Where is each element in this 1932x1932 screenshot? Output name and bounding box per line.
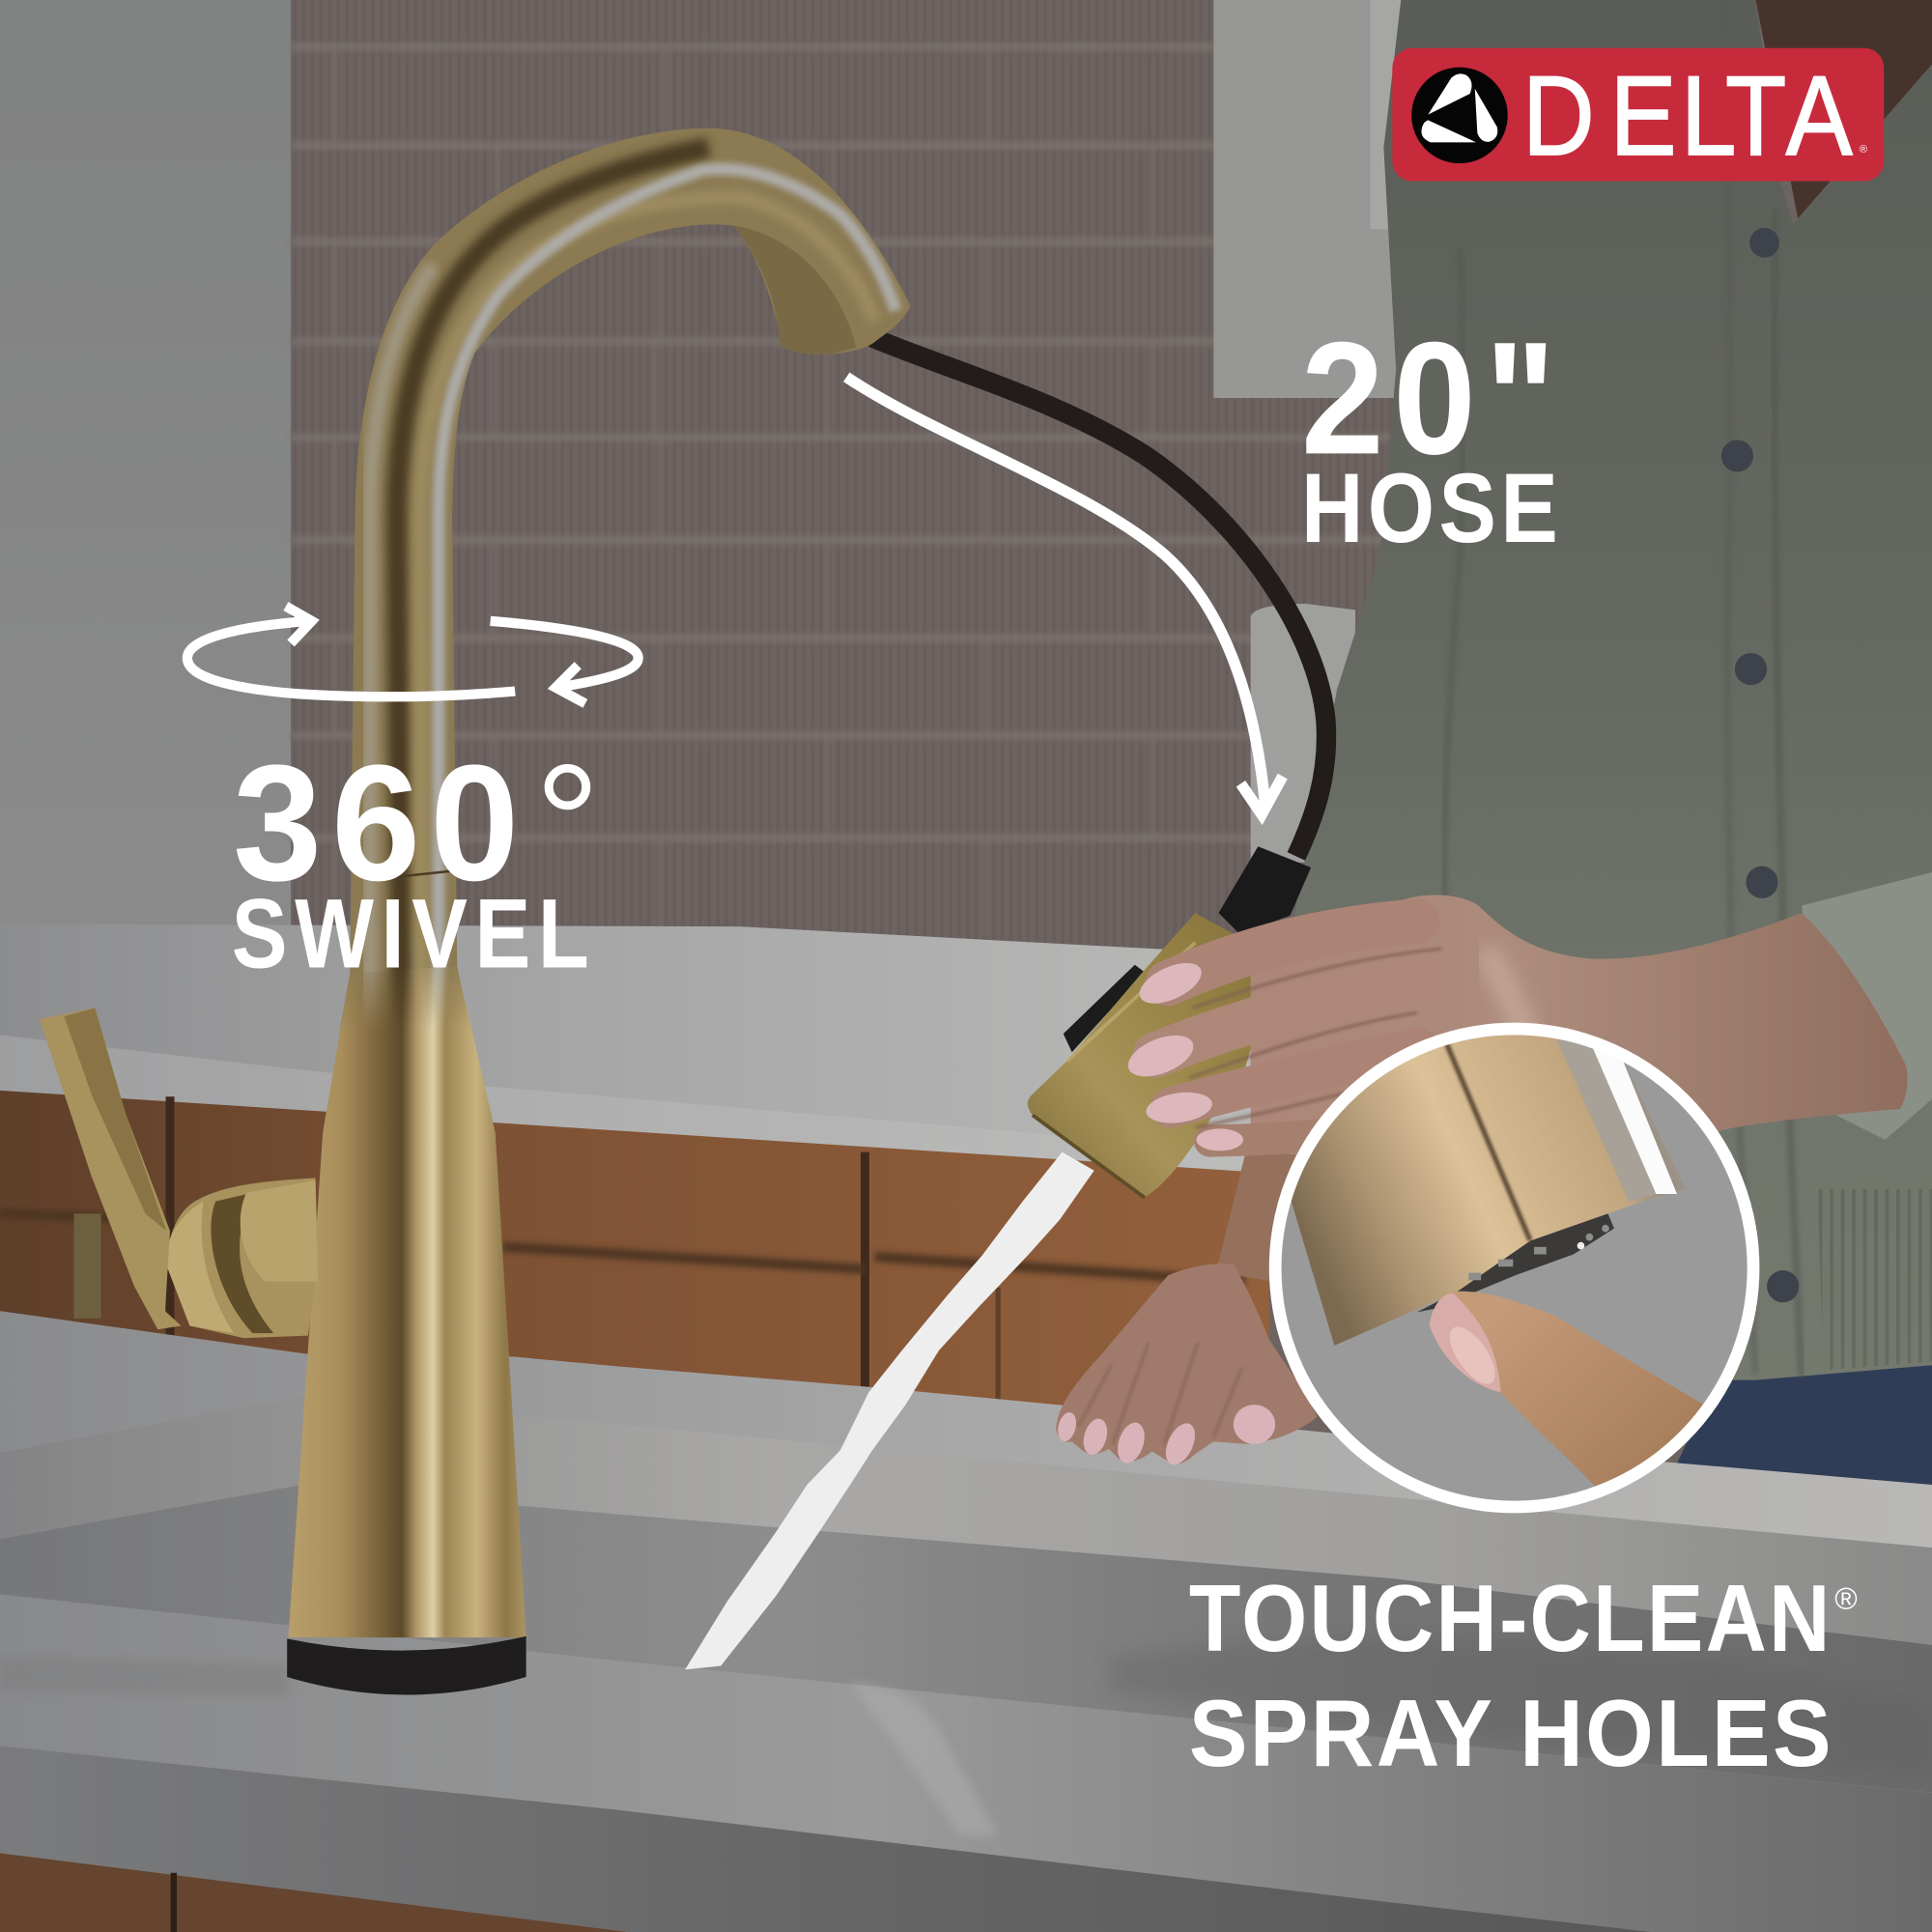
heading: 360 degree swivel: SWIVEL: [232, 878, 596, 988]
close-up spray head: [1282, 1016, 1686, 1346]
close-up finger: [1430, 1291, 1703, 1487]
faucet neck and spout: [340, 128, 910, 1029]
lower hand: [1055, 1152, 1318, 1469]
logo: Delta: ®: [1860, 144, 1868, 156]
sink deck back: [0, 1311, 1932, 1932]
lower hand fingernails: [1055, 1405, 1275, 1469]
arrow: hose length: [846, 377, 1283, 814]
spray holes: [1417, 1213, 1614, 1312]
gold spray wand: [1028, 913, 1269, 1198]
faucet body: [288, 966, 526, 1637]
cardigan buttons: [1721, 228, 1799, 1302]
heading: Touch-Clean spray holes: SPRAY HOLES: [1189, 1680, 1833, 1786]
wood cabinet bottom: [0, 1853, 629, 1932]
icon: swivel rotation arrows: [187, 607, 639, 703]
heading: 20 inch hose: HOSE: [1301, 453, 1562, 563]
icon: faucet: [40, 111, 924, 1694]
person: cardigan and jeans: [1293, 0, 1932, 1485]
icon: hose: [872, 337, 1326, 856]
counter behind faucet: [0, 924, 1269, 1177]
faucet black base: [287, 1636, 526, 1694]
callout: spray head close-up: [1275, 1016, 1753, 1507]
heading: Touch-Clean spray holes: TOUCH-CLEAN: [1189, 1565, 1833, 1671]
heading: 360 degree swivel: 360: [233, 731, 528, 916]
heading: 20 inch hose: 20": [1301, 309, 1565, 488]
logo: Delta: DELTA: [1522, 53, 1853, 179]
wood cabinets: [0, 1091, 1269, 1430]
icon: Delta triangle mark: [1411, 68, 1508, 163]
logo: Delta: [1392, 48, 1884, 181]
heading: Touch-Clean spray holes: ®: [1834, 1581, 1858, 1616]
upper hand and wrist: [1122, 895, 1908, 1171]
spray head: [1028, 846, 1311, 1198]
faucet handle: [40, 1008, 318, 1338]
heading: Touch-Clean spray holes: [1189, 1565, 1858, 1786]
water stream: [685, 1152, 1094, 1669]
heading: 360 degree swivel: [232, 729, 600, 988]
heading: 20 inch hose: [1301, 309, 1565, 563]
fingernails: [1122, 954, 1243, 1151]
heading: 360 degree swivel: °: [535, 729, 600, 913]
sink basin: [0, 1486, 1932, 1793]
sink front rim: [0, 1397, 1932, 1645]
hose connector: [1218, 846, 1311, 934]
spray button: [1064, 965, 1145, 1052]
sink front deck: [0, 1595, 1932, 1932]
